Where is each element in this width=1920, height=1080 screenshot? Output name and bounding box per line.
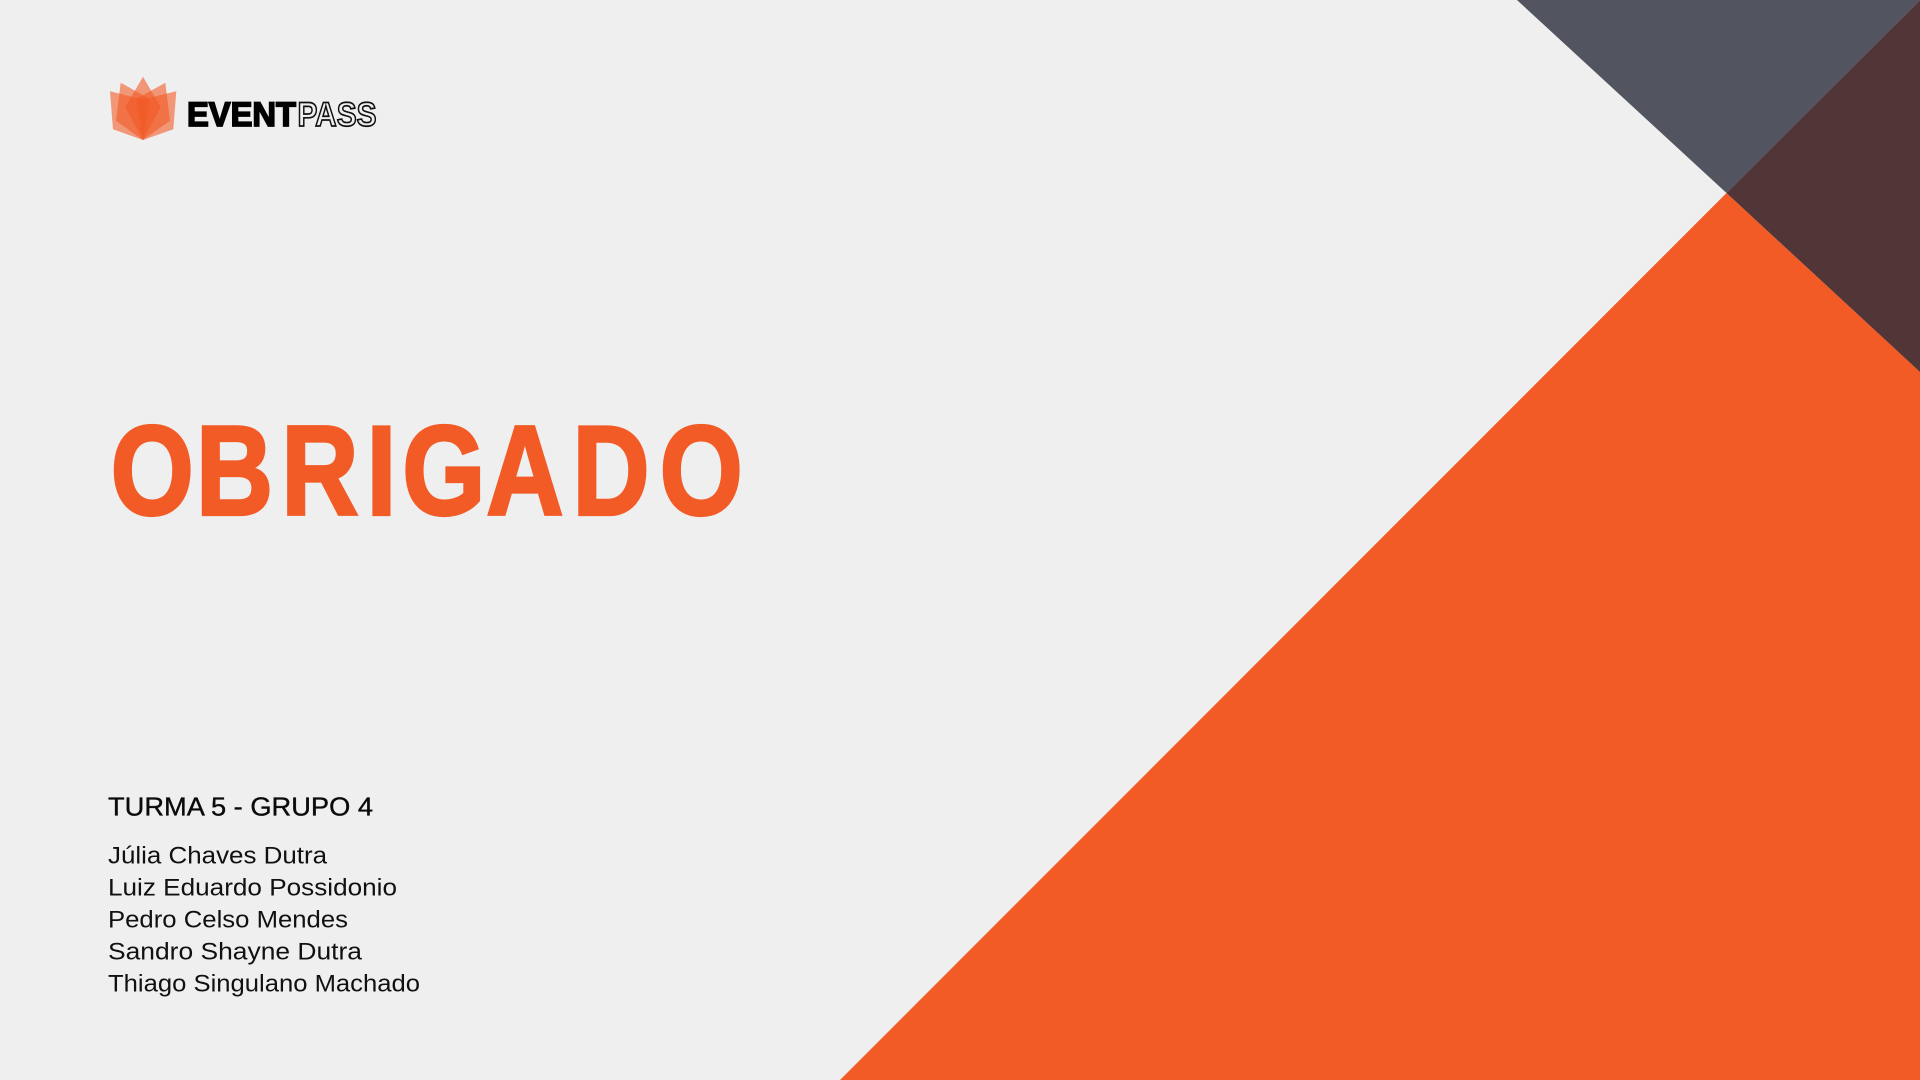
logo [110, 77, 376, 140]
icon: lotus book mark [110, 77, 176, 140]
name: Luiz Eduardo Possidonio [108, 874, 397, 901]
name: Sandro Shayne Dutra [108, 939, 362, 966]
logo wordmark: PASS [298, 96, 376, 134]
dark brown triangle [1726, 0, 1920, 372]
name: Thiago Singulano Machado [108, 971, 420, 998]
team member names [108, 842, 420, 998]
grey triangle [1517, 0, 1920, 193]
orange triangle [840, 193, 1920, 1080]
name: Júlia Chaves Dutra [108, 842, 327, 869]
name: Pedro Celso Mendes [108, 906, 348, 933]
title: OBRIGADO [111, 400, 743, 542]
group heading: TURMA 5 - GRUPO 4 [108, 794, 373, 822]
logo wordmark: EVENT [187, 96, 296, 134]
